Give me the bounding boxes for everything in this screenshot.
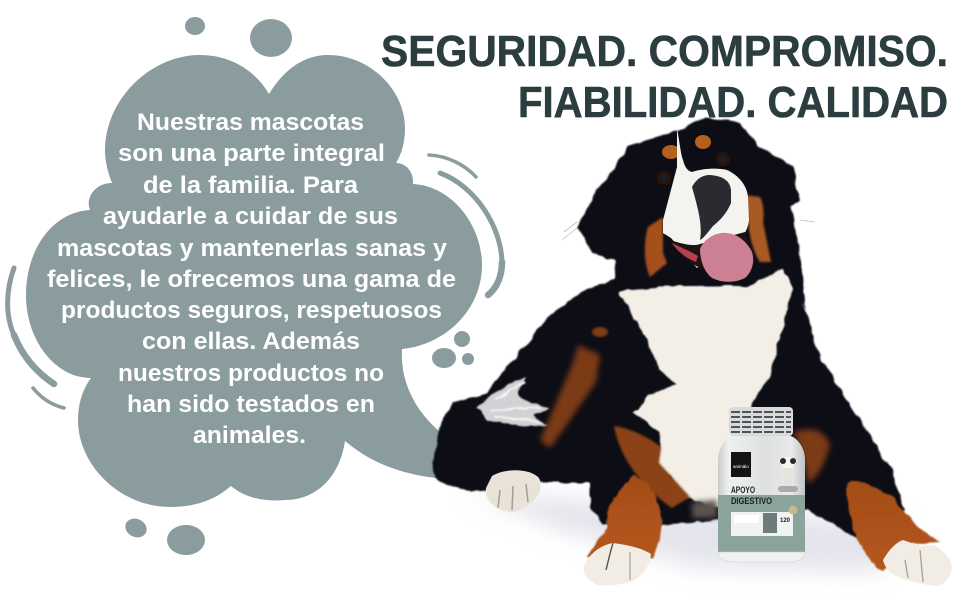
cloud body text: nuestros productos no [118, 360, 384, 387]
hip tan spot [592, 327, 608, 337]
brow spots [662, 145, 680, 159]
eyes [657, 171, 671, 185]
cloud body text: con ellas. Además [142, 328, 360, 355]
bottle body [718, 436, 805, 552]
gums [672, 243, 698, 262]
bottle product name: APOYO [731, 485, 755, 495]
cloud body text: felices, le ofrecemos una gama de [47, 266, 456, 293]
brand square [731, 452, 751, 477]
right foreleg tan [847, 482, 940, 572]
dog body and tail [433, 260, 905, 537]
cloud body text [47, 109, 456, 449]
supplement bottle [718, 407, 805, 562]
bottle product name: DIGESTIVO [731, 496, 772, 506]
rear white paw [486, 470, 541, 512]
bottle green band [718, 495, 805, 552]
cloud body text: de la familia. Para [143, 172, 358, 199]
right shoulder tan [793, 429, 830, 483]
gold seal [788, 506, 798, 514]
ground shadow [470, 492, 900, 572]
white blaze and muzzle [663, 128, 749, 268]
head [577, 118, 806, 310]
bottle info boxes: 120 [780, 518, 791, 524]
decorative cloud blobs [122, 17, 474, 555]
ear whiskers [562, 220, 815, 240]
bottle base [718, 552, 805, 562]
left foreleg tan [587, 475, 662, 558]
head tan cheeks [645, 217, 667, 277]
cloud body text: ayudarle a cuidar de sus [103, 203, 398, 230]
nose and muzzle shade [692, 175, 731, 240]
mouth [670, 232, 755, 278]
hip tan patch [540, 345, 600, 448]
cloud body text: han sido testados en [127, 391, 375, 418]
decorative swirl strokes [8, 155, 502, 408]
cloud body text: son una parte integral [118, 140, 385, 167]
bottle info boxes [731, 512, 793, 536]
cloud body text: animales. [193, 422, 306, 449]
headline [381, 27, 948, 127]
white chest [620, 265, 792, 512]
bottle product name [731, 485, 772, 506]
dog photo on label [778, 457, 798, 492]
cloud body text: mascotas y mantenerlas sanas y [57, 235, 447, 262]
tongue [700, 233, 753, 282]
brand square: animälo [733, 464, 749, 469]
cloud body text: Nuestras mascotas [137, 109, 364, 136]
lower chest shade [692, 500, 717, 518]
left white paw [584, 543, 651, 585]
chest tan left [614, 426, 690, 508]
cloud body text: productos seguros, respetuosos [61, 297, 442, 324]
right white paw [883, 540, 952, 586]
dog illustration [433, 118, 952, 586]
tail white streak [476, 376, 549, 426]
speech cloud panel [26, 55, 482, 507]
bottle cap [729, 407, 793, 436]
